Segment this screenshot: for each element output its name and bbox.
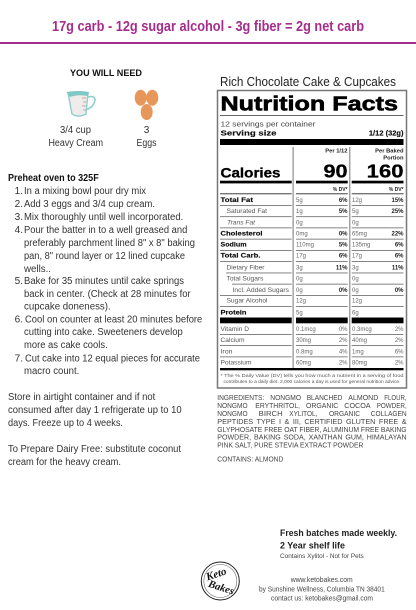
macronutrient rows: 6%: [395, 254, 404, 260]
column heads: [325, 148, 404, 162]
baking instructions: Bake for 35 minutes until cake springs: [24, 276, 184, 287]
freshness note: 2 Year shelf life: [280, 541, 345, 551]
servings: 12 servings per container: [220, 120, 316, 128]
eggs quantity label: Eggs: [136, 138, 156, 149]
vitamin and mineral rows: 30mg: [296, 338, 311, 344]
baking instructions: cupcake doneness).: [24, 302, 111, 312]
macronutrient rows: Total Carb.: [220, 253, 261, 260]
macronutrient rows: 0g: [352, 220, 359, 226]
baking instructions: In a mixing bowl pour dry mix: [24, 186, 146, 197]
cream quantity label: [48, 125, 103, 149]
macronutrient rows: [220, 197, 404, 316]
baking instructions: wells..: [23, 264, 51, 275]
cream quantity label: Heavy Cream: [48, 138, 103, 149]
ingredients list: PEPTIDES TYPE I & III, CERTIFIED GLUTEN FREE &: [217, 417, 407, 426]
macronutrient rows: 0g: [296, 220, 303, 226]
baking instructions: Cut cake into 12 equal pieces for accurate: [25, 354, 200, 364]
macronutrient rows: 17g: [352, 254, 362, 260]
macronutrient rows: 0g: [296, 288, 303, 294]
vitamin and mineral rows: 4%: [339, 349, 348, 355]
macronutrient rows: Incl. Added Sugars: [232, 288, 289, 294]
dairy free note: To Prepare Dairy Free: substitute coconut: [8, 444, 181, 455]
vitamin and mineral rows: 0.1mcg: [296, 327, 316, 333]
ingredients list: ERYTHRITOL,: [255, 401, 300, 410]
macronutrient rows: 11%: [336, 265, 348, 271]
vitamin and mineral rows: 0%: [339, 327, 348, 333]
vitamin and mineral rows: Vitamin D: [220, 327, 250, 333]
calories row: 160: [367, 160, 404, 181]
ingredients list: INGREDIENTS:: [217, 393, 264, 402]
vitamin and mineral rows: 60mg: [296, 360, 311, 366]
baking instructions: 6.: [15, 314, 23, 326]
allergen statement: CONTAINS: ALMOND: [217, 455, 283, 464]
vitamin and mineral rows: 80mg: [352, 360, 367, 366]
vitamin and mineral rows: Iron: [220, 349, 232, 355]
macronutrient rows: 135mg: [352, 243, 370, 249]
contact details: by Sunshine Wellness, Columbia TN 38401: [259, 586, 385, 593]
column heads: Portion: [383, 156, 404, 162]
ingredients list: GLYPHOSATE FREE OAT FIBER, ALUMINUM FREE BAKING: [217, 425, 407, 434]
vitamin and mineral rows: 2%: [395, 360, 404, 366]
baking instructions: preferably parchment lined 8" x 8" baking: [24, 238, 195, 249]
calories row: 90: [324, 160, 348, 181]
macronutrient rows: Total Sugars: [226, 276, 264, 282]
baking instructions: 3.: [15, 212, 23, 223]
macronutrient rows: Dietary Fiber: [226, 265, 264, 271]
dairy free note: cream for the heavy cream.: [8, 457, 121, 468]
ingredients list: PINK SALT, PURE STEVIA EXTRACT POWDER: [217, 441, 363, 450]
macronutrient rows: 5g: [296, 310, 303, 316]
macronutrient rows: 12g: [352, 198, 362, 204]
daily value heads: % DV*: [389, 187, 404, 193]
vitamin and mineral rows: Calcium: [220, 338, 245, 344]
macronutrient rows: 5%: [339, 243, 348, 249]
ingredients list: ORGANIC: [306, 401, 338, 410]
product title: Rich Chocolate Cake & Cupcakes: [220, 75, 396, 89]
macronutrient rows: 6%: [339, 198, 348, 204]
baking instructions: macro count.: [24, 366, 79, 377]
daily value heads: [333, 187, 404, 193]
vitamin and mineral rows: Potassium: [220, 360, 252, 366]
baking instructions: [8, 173, 203, 377]
column heads: Per Baked: [375, 148, 404, 154]
macronutrient rows: 0g: [352, 288, 359, 294]
daily value footnote: * The % Daily Value (DV) tells you how much a nutrient in a serving of food: [220, 373, 404, 378]
macronutrient rows: 3g: [352, 265, 359, 271]
macronutrient rows: 6g: [352, 310, 359, 316]
icon: keto bakes logo: Keto: [204, 565, 229, 584]
baking instructions: Cool on counter at least 20 minutes before: [25, 314, 203, 326]
macronutrient rows: 0%: [339, 231, 348, 237]
macronutrient rows: Sugar Alcohol: [226, 299, 268, 305]
macronutrient rows: 15%: [391, 198, 404, 204]
baking instructions: Pour the batter in to a well greased and: [24, 225, 187, 236]
dairy free note: [8, 444, 181, 468]
macronutrient rows: 12g: [352, 299, 362, 305]
vitamin and mineral rows: 2%: [395, 338, 404, 344]
daily value heads: % DV*: [333, 187, 348, 193]
macronutrient rows: 0%: [339, 288, 348, 294]
macronutrient rows: 1g: [296, 209, 303, 215]
contact details: [259, 577, 385, 603]
macronutrient rows: Cholesterol: [220, 230, 263, 237]
macronutrient rows: 12g: [296, 299, 306, 305]
cream quantity label: 3/4 cup: [60, 125, 91, 136]
baking instructions: 2.: [15, 199, 23, 210]
baking instructions: more as cake cools.: [24, 340, 108, 351]
you will need heading: YOU WILL NEED: [70, 68, 142, 79]
baking instructions: 4.: [15, 225, 23, 236]
panel: nutrition facts label: [218, 90, 406, 388]
baking instructions: pan, 8" round layer or 12 lined cupcake: [24, 251, 185, 262]
freshness note: Contains Xylitol - Not for Pets: [280, 553, 364, 560]
ingredients list: FLOUR,: [384, 393, 407, 402]
purple header rule: [0, 42, 416, 44]
vitamin and mineral rows: [220, 327, 404, 366]
calories row: Calories: [220, 164, 281, 180]
table rule lines: [220, 193, 404, 357]
ingredients list: NONGMO: [217, 401, 248, 410]
vitamin and mineral rows: 40mg: [352, 338, 367, 344]
macronutrient rows: 5g: [352, 209, 359, 215]
storage note: consumed after day 1 refrigerate up to 10: [8, 405, 182, 416]
macronutrient rows: Total Fat: [220, 197, 254, 204]
macronutrient rows: Protein: [220, 309, 247, 316]
ingredients list: ALMOND: [348, 393, 378, 402]
contact details: contact us: ketobakes@gmail.com: [271, 596, 373, 603]
baking instructions: 7.: [15, 354, 23, 364]
macronutrient rows: Sodium: [220, 242, 247, 249]
macronutrient rows: 5g: [296, 198, 303, 204]
macronutrient rows: 110mg: [296, 243, 314, 249]
column dividers: [293, 147, 350, 369]
baking instructions: Preheat oven to 325F: [8, 173, 99, 184]
serving size: Serving size: [220, 129, 276, 138]
macronutrient rows: 22%: [391, 231, 404, 237]
contact details: www.ketobakes.com: [290, 577, 353, 584]
daily value footnote: [220, 373, 404, 384]
column heads: Per 1/12: [325, 148, 348, 154]
vitamin and mineral rows: 0.8mg: [296, 349, 313, 355]
vitamin and mineral rows: 2%: [339, 338, 348, 344]
vitamin and mineral rows: 6%: [395, 349, 404, 355]
baking instructions: 1.: [15, 186, 23, 197]
ingredients list: POWDER, BAKING SODA, XANTHAN GUM, HIMALAYAN: [217, 433, 407, 442]
ingredients list: COCOA: [344, 401, 371, 410]
freshness note: Fresh batches made weekly.: [280, 528, 397, 538]
macronutrient rows: Trans Fat: [227, 220, 255, 226]
macronutrient rows: 0%: [395, 288, 404, 294]
freshness note: [280, 528, 397, 560]
macronutrient rows: 25%: [391, 209, 404, 215]
macronutrient rows: 0g: [352, 276, 359, 282]
ingredients list: NONGMO: [217, 409, 248, 418]
calories row: [220, 160, 404, 181]
ingredients list: BLANCHED: [307, 393, 342, 402]
vitamin and mineral rows: 2%: [395, 327, 404, 333]
macronutrient rows: 5%: [339, 209, 348, 215]
macronutrient rows: 6%: [339, 254, 348, 260]
macronutrient rows: 6%: [395, 243, 404, 249]
macronutrient rows: 11%: [392, 265, 404, 271]
storage note: days. Freeze up to 4 weeks.: [8, 418, 123, 429]
nutrition facts title: Nutrition Facts: [220, 93, 398, 116]
vitamin and mineral rows: 0.3mcg: [352, 327, 372, 333]
daily value footnote: contributes to a daily diet. 2,000 calories a day is used for general nutrition advice.: [224, 379, 400, 384]
eggs quantity label: [136, 125, 156, 149]
icon: measuring cup: [66, 91, 95, 116]
ingredients list: ORGANIC: [329, 409, 360, 418]
net carb formula heading: 17g carb - 12g sugar alcohol - 3g fiber = 2g net carb: [52, 18, 364, 35]
macronutrient rows: 0g: [296, 276, 303, 282]
ingredients list: XYLITOL,: [289, 409, 317, 418]
eggs quantity label: 3: [144, 125, 150, 136]
baking instructions: Mix thoroughly until well incorporated.: [24, 212, 183, 223]
icon: keto bakes logo: [201, 562, 239, 600]
baking instructions: 5.: [15, 276, 23, 287]
ingredients list: [217, 393, 407, 450]
serving size: 1/12 (32g): [369, 129, 404, 138]
icon: eggs: [135, 90, 158, 120]
baking instructions: cutting into cake. Sweeteners develop: [24, 327, 183, 338]
baking instructions: back in center. (Check at 28 minutes for: [24, 289, 191, 300]
ingredients list: COLLAGEN: [371, 409, 407, 418]
ingredients list: NONGMO: [270, 393, 301, 402]
storage note: Store in airtight container and if not: [8, 392, 156, 403]
vitamin and mineral rows: 1mg: [352, 349, 364, 355]
macronutrient rows: 0mg: [296, 231, 308, 237]
serving size: [220, 129, 404, 138]
macronutrient rows: 65mg: [352, 231, 367, 237]
storage note: [8, 392, 182, 429]
baking instructions: Add 3 eggs and 3/4 cup cream.: [24, 199, 155, 210]
ingredients list: POWDER,: [377, 401, 407, 410]
icon: keto bakes logo: Bakes: [206, 579, 235, 597]
macronutrient rows: Saturated Fat: [226, 209, 267, 215]
ingredients list: BIRCH: [259, 409, 283, 418]
vitamin and mineral rows: 2%: [339, 360, 348, 366]
macronutrient rows: 3g: [296, 265, 303, 271]
macronutrient rows: 17g: [296, 254, 306, 260]
